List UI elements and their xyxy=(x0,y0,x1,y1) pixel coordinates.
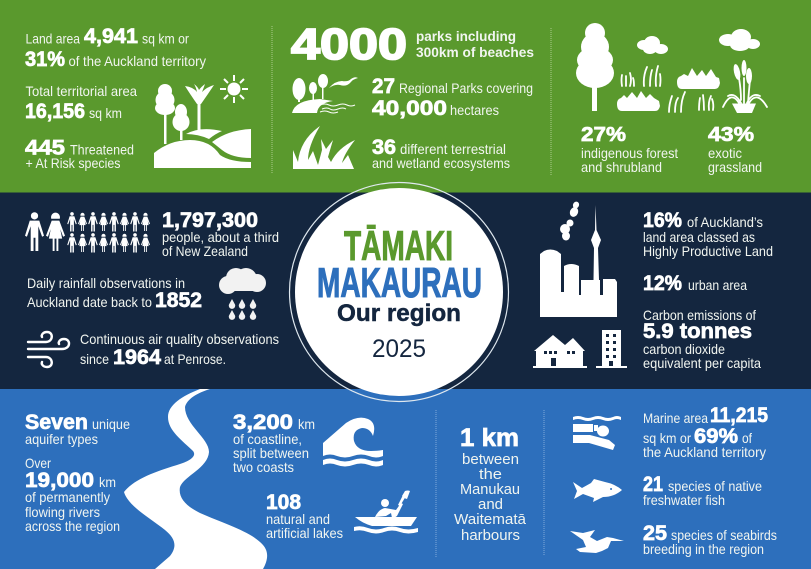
text block: coastline: two coasts xyxy=(233,460,294,475)
icon: wave xyxy=(323,418,383,466)
icon: fish xyxy=(573,479,622,502)
text block: rainfall: 1852 xyxy=(155,289,202,312)
text block: coastline: split between xyxy=(233,446,309,461)
text block: regional parks xyxy=(372,75,533,120)
icon: island with trees and bird xyxy=(292,74,358,113)
text block: threatened species xyxy=(25,136,134,171)
text block: rivers: flowing rivers xyxy=(25,505,100,520)
text block: regional parks: 40,000 xyxy=(372,97,447,120)
text block: rivers xyxy=(25,456,120,534)
text block: fish species: freshwater fish xyxy=(643,493,725,508)
text block: rivers: of permanently xyxy=(25,490,110,505)
title: Tāmaki: TĀMAKI xyxy=(344,222,453,269)
text block: land area: 4,941 xyxy=(84,25,138,48)
text block: rivers: 19,000 xyxy=(25,469,94,492)
icon: seabird xyxy=(570,530,624,553)
text block: fish species: species of native xyxy=(668,479,762,494)
text block: productive land: land area classed as xyxy=(643,230,755,245)
text block: total territorial area: 16,156 xyxy=(25,100,85,123)
text block: seabird species xyxy=(643,522,777,557)
text block: aquifers: Seven xyxy=(25,411,88,434)
text block: seabird species: breeding in the region xyxy=(643,542,764,557)
title roundel xyxy=(290,182,508,402)
text block: aquifers: unique xyxy=(92,417,130,432)
text block: air quality xyxy=(80,332,279,369)
text block: land area: 31% xyxy=(25,48,65,71)
icon: grass tussock xyxy=(293,126,355,169)
text block: 4000 parks: parks including xyxy=(416,28,516,44)
text block: 1 km between harbours: 1 km xyxy=(460,424,519,452)
text block: lakes: natural and xyxy=(266,512,330,527)
title: Makaurau: MAKAURAU xyxy=(317,259,482,306)
icon: city skyline with Sky Tower xyxy=(540,201,617,317)
text block: air quality: at Penrose. xyxy=(164,352,226,367)
text block: rainfall xyxy=(27,276,202,312)
text block: regional parks: hectares xyxy=(450,103,499,118)
text block: threatened species: + At Risk species xyxy=(26,156,121,171)
text block: exotic grassland: 43% xyxy=(708,124,754,146)
icon: river xyxy=(124,389,267,569)
text block: coastline: of coastline, xyxy=(233,432,302,447)
text block: 1 km between harbours xyxy=(454,424,527,544)
text block: exotic grassland xyxy=(708,124,762,175)
text block: regional parks: Regional Parks covering xyxy=(399,81,533,96)
text block: ecosystems: and wetland ecosystems xyxy=(372,156,510,171)
text block: coastline xyxy=(233,411,315,475)
icon: landscape with trees and sun xyxy=(154,75,251,168)
text block: marine area xyxy=(643,404,768,460)
icon: wind xyxy=(28,332,69,367)
text block: air quality: 1964 xyxy=(113,346,161,369)
text block: ecosystems: 36 xyxy=(372,136,396,159)
panel: green land band xyxy=(0,0,811,192)
text block: air quality: since xyxy=(80,352,109,367)
icon: diver and sea surface xyxy=(573,416,621,450)
text block: indigenous forest: and shrubland xyxy=(581,160,662,175)
text block: productive land: of Auckland’s xyxy=(687,215,763,230)
text block: population: 1,797,300 xyxy=(162,209,258,232)
text block: productive land: 16% xyxy=(643,209,682,232)
text block: carbon emissions: 5.9 tonnes xyxy=(643,320,752,343)
subtitle: Our region: Our region xyxy=(337,300,461,327)
text block: land area: Land area xyxy=(26,32,80,46)
text block: productive land xyxy=(643,209,773,259)
text block: 1 km between harbours: and xyxy=(478,497,503,513)
text block: population: of New Zealand xyxy=(162,244,248,259)
text block: threatened species: 445 xyxy=(25,136,65,160)
text block: 4000 parks xyxy=(291,20,534,69)
text block: marine area: Marine area xyxy=(643,411,708,426)
text block: rainfall: Daily rainfall observations in xyxy=(27,276,185,291)
text block: coastline: km xyxy=(298,417,315,432)
text block: population: people, about a third xyxy=(162,230,279,245)
text block: 1 km between harbours: the xyxy=(479,467,502,483)
text block: total territorial area: sq km xyxy=(89,106,122,121)
text block: exotic grassland: grassland xyxy=(708,160,762,175)
text block: aquifers: aquifer types xyxy=(25,432,98,447)
text block: threatened species: Threatened xyxy=(70,142,134,158)
text block: indigenous forest: indigenous forest xyxy=(581,146,678,161)
text block: marine area: 11,215 xyxy=(710,404,768,427)
text block: marine area: the Auckland territory xyxy=(643,445,766,460)
text block: indigenous forest: 27% xyxy=(581,124,626,146)
text block: productive land: Highly Productive Land xyxy=(643,244,773,259)
text block: 4000 parks: 4000 xyxy=(291,20,407,69)
text block: urban area: 12% xyxy=(643,272,682,295)
text block: 1 km between harbours: Waitematā xyxy=(454,512,527,528)
text block: rainfall: Auckland date back to xyxy=(27,295,152,310)
text block: rivers: Over xyxy=(25,456,51,471)
text block: fish species: 21 xyxy=(643,473,663,496)
text block: marine area: of xyxy=(742,431,752,446)
text block: ecosystems: different terrestrial xyxy=(400,142,506,157)
icon: houses xyxy=(533,335,587,368)
text block: urban area: urban area xyxy=(688,278,747,293)
text block: ecosystems xyxy=(372,136,510,171)
icon: rain cloud xyxy=(219,268,266,320)
text block: 1 km between harbours: Manukau xyxy=(460,482,520,498)
panel: blue water band xyxy=(0,389,811,569)
text block: rivers: across the region xyxy=(25,519,120,534)
panel: navy people and climate band xyxy=(0,192,811,389)
text block: lakes xyxy=(266,491,343,541)
text block: air quality: Continuous air quality observations xyxy=(80,332,279,347)
icon: forest, shrubs and grasses xyxy=(576,23,767,113)
icon: kayak xyxy=(354,490,418,534)
text block: carbon emissions: Carbon emissions of xyxy=(643,308,756,323)
text block: coastline: 3,200 xyxy=(233,411,293,434)
text block: indigenous forest xyxy=(581,124,678,175)
text block: lakes: artificial lakes xyxy=(266,526,343,541)
text block: carbon emissions: equivalent per capita xyxy=(643,356,761,371)
text block: land area xyxy=(25,25,206,71)
text block: lakes: 108 xyxy=(266,491,301,514)
text block: fish species xyxy=(643,473,762,508)
text block: 1 km between harbours: harbours xyxy=(461,528,520,544)
text block: land area: of the Auckland territory xyxy=(68,54,206,69)
text block: marine area: sq km or xyxy=(643,431,691,446)
icon: people group xyxy=(25,212,150,253)
text block: exotic grassland: exotic xyxy=(708,146,742,161)
text block: carbon emissions xyxy=(643,308,761,371)
text block: total territorial area xyxy=(25,84,137,123)
text block: 1 km between harbours: between xyxy=(462,452,519,468)
text block: carbon emissions: carbon dioxide xyxy=(643,342,725,357)
text block: seabird species: 25 xyxy=(643,522,667,545)
text block: land area: sq km or xyxy=(142,32,189,46)
text block: urban area xyxy=(643,272,747,295)
text block: total territorial area: Total territorial area xyxy=(26,84,137,99)
text block: 4000 parks: 300km of beaches xyxy=(416,44,534,60)
year: 2025 xyxy=(372,335,426,363)
text block: rivers: km xyxy=(99,475,116,490)
text block: population xyxy=(162,209,279,259)
text block: marine area: 69% xyxy=(694,425,738,448)
text block: aquifers xyxy=(25,411,130,447)
text block: seabird species: species of seabirds xyxy=(671,528,777,543)
icon: apartment block xyxy=(596,330,627,368)
text block: regional parks: 27 xyxy=(372,75,395,98)
